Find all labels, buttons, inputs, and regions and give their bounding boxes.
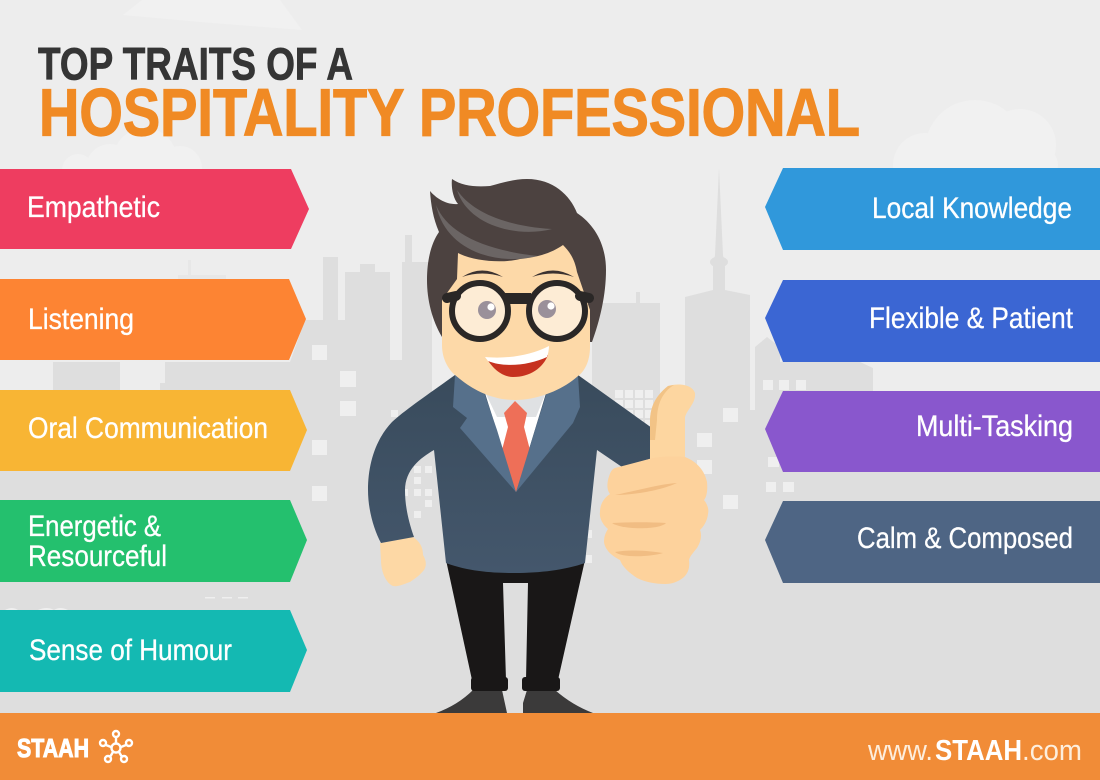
left hand (380, 537, 426, 586)
ribbon: Empathetic: Empathetic (27, 191, 160, 224)
ribbon: Multi-Tasking: Multi-Tasking (916, 410, 1073, 443)
ribbon: Oral Communication (0, 390, 307, 471)
fist (600, 456, 708, 584)
footer logo (17, 731, 132, 763)
footer website url: .com (1022, 735, 1082, 767)
face (442, 245, 590, 400)
suit jacket (368, 375, 653, 573)
shirt (484, 390, 547, 492)
character: businessman giving thumbs up (368, 179, 708, 713)
thumb (650, 384, 695, 462)
ribbon: Local Knowledge: Local Knowledge (872, 192, 1072, 225)
shoes (436, 690, 593, 713)
footer bar (0, 713, 1100, 780)
ribbon: Calm and Composed (765, 501, 1100, 583)
logo wordmark: STAAH (17, 733, 89, 763)
glasses (447, 283, 589, 339)
thumb shadow (650, 385, 674, 440)
trousers (446, 560, 585, 691)
hair highlights (436, 190, 552, 259)
ribbon: Listening: Listening (28, 303, 134, 336)
ribbon: Energetic and Resourceful: Resourceful (28, 540, 167, 573)
ribbon: Multi-Tasking (765, 391, 1100, 472)
ribbon: Sense of Humour (0, 610, 307, 692)
ribbon: Energetic and Resourceful: Energetic & (28, 510, 161, 543)
panel: right trait ribbons (765, 168, 1100, 583)
ribbon: Listening (0, 279, 306, 360)
title (38, 38, 860, 150)
footer website url (867, 735, 1082, 767)
footer website url: STAAH (935, 735, 1022, 767)
lapels (453, 375, 580, 492)
ribbon: Flexible and Patient (765, 280, 1100, 362)
footer website url: www. (867, 735, 933, 767)
ribbon: Empathetic (0, 169, 309, 249)
eyebrows (462, 270, 574, 277)
tie (502, 401, 530, 492)
hair (427, 179, 606, 342)
title line 1: TOP TRAITS OF A (38, 38, 353, 90)
fist creases (612, 483, 677, 556)
ribbon: Energetic and Resourceful (0, 500, 307, 582)
eyes (478, 300, 556, 319)
panel: left trait ribbons (0, 169, 309, 692)
ribbon: Oral Communication: Oral Communication (28, 412, 268, 445)
title line 2: HOSPITALITY PROFESSIONAL (39, 76, 860, 150)
ribbon: Sense of Humour: Sense of Humour (29, 634, 232, 667)
ribbon: Flexible and Patient: Flexible & Patient (869, 302, 1074, 335)
ribbon: Local Knowledge (765, 168, 1100, 250)
icon: network hub (100, 731, 132, 762)
mouth (485, 346, 549, 377)
